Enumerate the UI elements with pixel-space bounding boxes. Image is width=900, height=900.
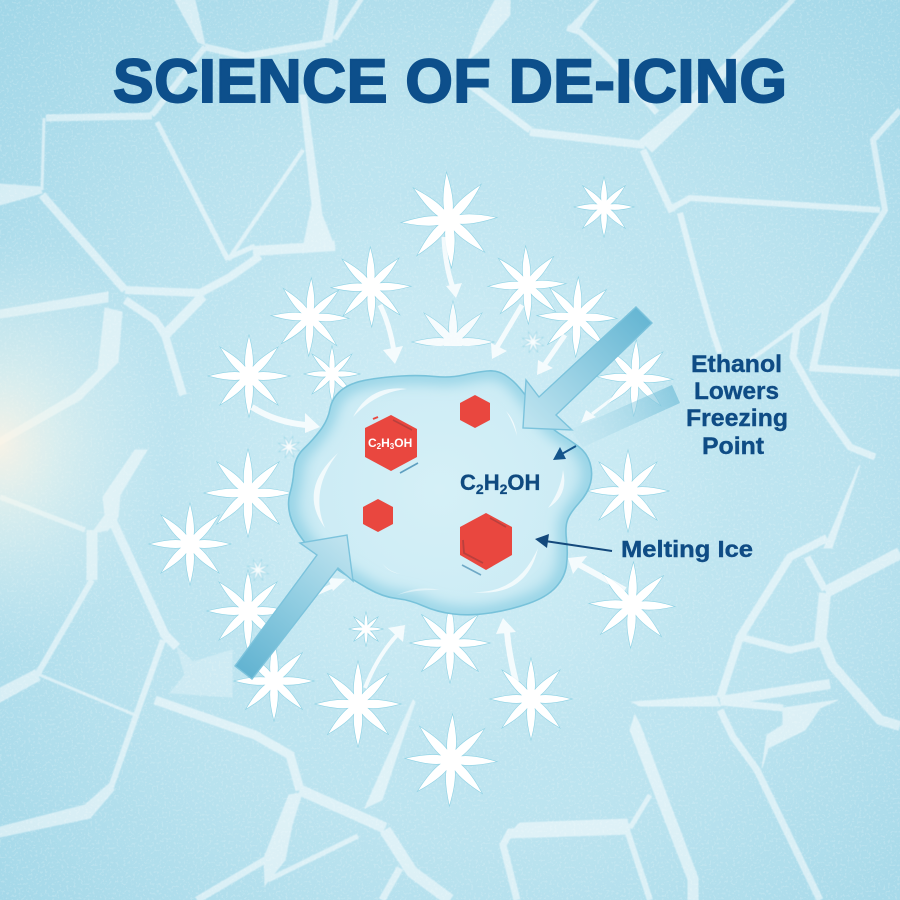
title: SCIENCE OF DE-ICING (113, 47, 787, 115)
big arrow bottom left (235, 535, 353, 679)
melting snowflake half (411, 300, 495, 346)
big arrow top right (523, 307, 652, 430)
small hexagon top (460, 395, 490, 428)
hexagon formula label: 2 (377, 442, 382, 451)
tiny flakes (245, 329, 546, 583)
formula C2H2OH: 2 (500, 481, 508, 497)
pool highlights (314, 388, 564, 595)
large hexagon (460, 513, 512, 575)
snowflake bottom left (316, 662, 400, 746)
ethanol hexagon with formula (365, 415, 418, 473)
snowflakes (150, 171, 675, 807)
formula C2H2OH: OH (507, 470, 540, 495)
small hexagon left (363, 499, 393, 532)
label: ethanol lowers freezing point: Point (702, 433, 764, 460)
snowflake top right (575, 178, 633, 236)
melting ice pool (288, 371, 592, 615)
label: ethanol lowers freezing point (686, 351, 788, 460)
snowflake far left (150, 504, 230, 584)
formula C2H2OH: H (484, 470, 500, 495)
snowflake bottom right (491, 659, 571, 739)
snowflake right middle (588, 451, 668, 531)
snowflake upper right b (537, 277, 617, 357)
snowflake right lower (589, 562, 675, 648)
formula C2H2OH: C (460, 470, 476, 495)
snowflake near pool upper left (305, 347, 359, 401)
hexagon formula label: 3 (390, 442, 395, 451)
snowflake bottom centre (404, 713, 498, 807)
label: ethanol lowers freezing point: Freezing (686, 405, 788, 432)
snowflake top centre (400, 171, 498, 269)
snowflake upper left a (331, 247, 411, 327)
faint arrow band right (570, 385, 680, 447)
formula C2H2OH: 2 (476, 481, 484, 497)
snowflake left lower (208, 571, 288, 651)
snowflake upper right a (488, 246, 566, 324)
snowflake right upper (597, 340, 673, 416)
hexagon formula label: C (368, 436, 377, 450)
snowflake left middle (205, 450, 291, 536)
label: ethanol lowers freezing point: Lowers (694, 378, 779, 405)
hexagon formula label: H (381, 436, 390, 450)
small arrow to pool (553, 446, 576, 460)
white movement arrows (252, 237, 625, 688)
label: melting ice: Melting Ice (621, 536, 753, 562)
hexagon formula label: OH (394, 436, 412, 450)
tiny snowflake thin (350, 613, 382, 645)
snowflake below pool (411, 604, 489, 682)
snowflake left upper (209, 336, 289, 416)
left sunlight glow (0, 220, 175, 670)
snowflake upper left b (271, 278, 349, 356)
label: ethanol lowers freezing point: Ethanol (691, 351, 782, 378)
snowflake at arrow tail (235, 642, 313, 720)
melting ice arrow (535, 534, 612, 551)
